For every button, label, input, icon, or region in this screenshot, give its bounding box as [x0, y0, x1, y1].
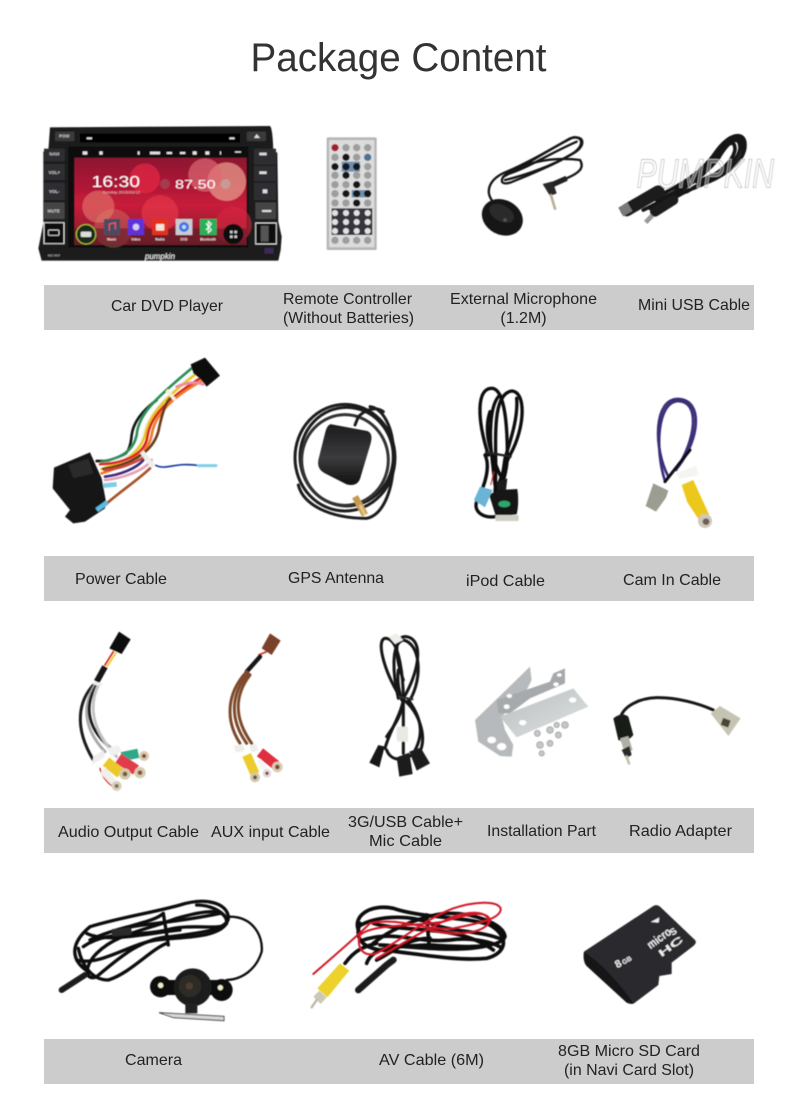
label: ipod cable: iPod Cable: [466, 573, 545, 590]
ipod cable: [474, 388, 522, 521]
label: external microphone: External Microphone: [450, 291, 597, 308]
label bar row 1: [44, 285, 754, 330]
label: av cable: AV Cable (6M): [379, 1052, 484, 1069]
car dvd player: MUTE: [48, 208, 60, 213]
label: remote controller: (Without Batteries): [283, 310, 414, 327]
label: micro sd card: 8GB Micro SD Card: [558, 1043, 700, 1060]
car dvd player: Music: [107, 238, 117, 242]
camera: [62, 901, 262, 1021]
aux input cable: [230, 633, 283, 782]
car dvd player: Bluetooth: [200, 238, 216, 242]
av cable: [312, 903, 505, 1007]
label: remote controller: [283, 291, 414, 327]
title: Package Content: [250, 36, 546, 80]
label: external microphone: (1.2M): [500, 310, 547, 327]
label: power cable: Power Cable: [75, 571, 167, 588]
label: audio output cable: Audio Output Cable: [58, 824, 199, 841]
label: micro sd card: (in Navi Card Slot): [564, 1062, 694, 1079]
label: aux input cable: AUX input Cable: [211, 824, 330, 841]
label: mini usb cable: Mini USB Cable: [638, 297, 750, 314]
radio adapter: [613, 698, 741, 763]
label: camera: Camera: [125, 1052, 182, 1069]
label: micro sd card: [558, 1043, 700, 1079]
car dvd player: POW: [59, 134, 70, 139]
3g usb and mic cable: [369, 633, 430, 777]
external microphone: [475, 137, 582, 243]
label: installation part: Installation Part: [487, 823, 597, 840]
micro sd card: S: [668, 926, 679, 938]
car dvd player: VOL-: [49, 189, 60, 194]
installation part: [475, 667, 588, 757]
label: cam in cable: Cam In Cable: [623, 572, 721, 589]
label: 3g usb mic cable: [348, 814, 463, 850]
label: 3g usb mic cable: Mic Cable: [369, 833, 442, 850]
car dvd player: MIC RST: [48, 253, 60, 257]
car dvd player: [38, 126, 282, 261]
mini usb cable: [618, 136, 774, 222]
micro sd card: 8GB: [613, 952, 634, 971]
car dvd player: DVD: [180, 238, 188, 242]
audio output cable: [80, 632, 149, 791]
micro sd card: [584, 905, 696, 1004]
label: 3g usb mic cable: 3G/USB Cable+: [348, 814, 463, 831]
label bar row 3: [44, 808, 754, 853]
car dvd player: Video: [131, 238, 140, 242]
remote controller: [327, 137, 377, 250]
car dvd player: VOL+: [49, 170, 61, 175]
bokeh wallpaper: [74, 158, 252, 248]
car dvd player: NAVI: [49, 152, 59, 157]
car dvd player: Radio: [155, 238, 165, 242]
gps antenna: [295, 404, 395, 518]
car dvd player: 16:30: [92, 174, 140, 191]
label: gps antenna: GPS Antenna: [288, 570, 384, 587]
label: remote controller: Remote Controller: [283, 291, 413, 308]
label: external microphone: [450, 291, 597, 327]
car dvd player: Sunday 2015/03/12: [103, 191, 140, 195]
label: radio adapter: Radio Adapter: [629, 823, 733, 840]
car dvd player: 87.50: [175, 177, 216, 191]
cam in cable: [646, 399, 712, 528]
label bar row 4: [44, 1039, 754, 1084]
label bar row 2: [44, 556, 754, 601]
power cable: [53, 358, 220, 523]
car dvd player: pumpkin: [144, 252, 176, 261]
micro sd card: micro: [644, 925, 674, 952]
label: car dvd player: Car DVD Player: [111, 298, 224, 315]
micro sd card: HC: [657, 934, 686, 960]
